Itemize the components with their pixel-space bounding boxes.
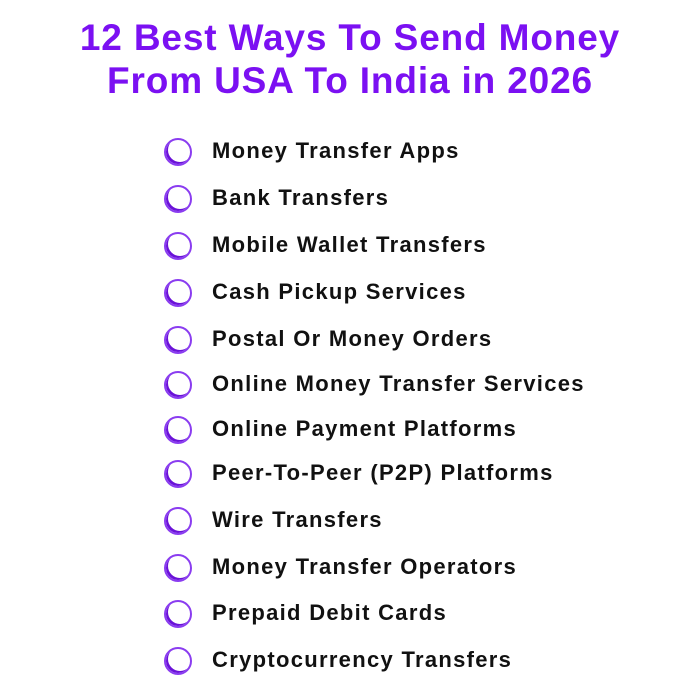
list item 4: Cash Pickup Services <box>212 279 467 304</box>
list item 6: Online Money Transfer Services <box>212 371 585 396</box>
list item 11: Prepaid Debit Cards <box>212 600 447 625</box>
list item 8: Peer-To-Peer (P2P) Platforms <box>212 460 554 485</box>
list item 9 <box>164 507 383 535</box>
list item 10: Money Transfer Operators <box>212 554 517 579</box>
list item 5: Postal Or Money Orders <box>212 326 492 351</box>
list item 7: Online Payment Platforms <box>212 416 517 441</box>
list item 3: Mobile Wallet Transfers <box>212 232 487 257</box>
title: From USA To India in 2026 <box>107 60 593 101</box>
title <box>80 17 620 101</box>
list item 12: Cryptocurrency Transfers <box>212 647 512 672</box>
title: 12 Best Ways To Send Money <box>80 17 620 58</box>
list item 2: Bank Transfers <box>212 185 389 210</box>
list item 1: Money Transfer Apps <box>212 138 460 163</box>
list item 9: Wire Transfers <box>212 507 383 532</box>
